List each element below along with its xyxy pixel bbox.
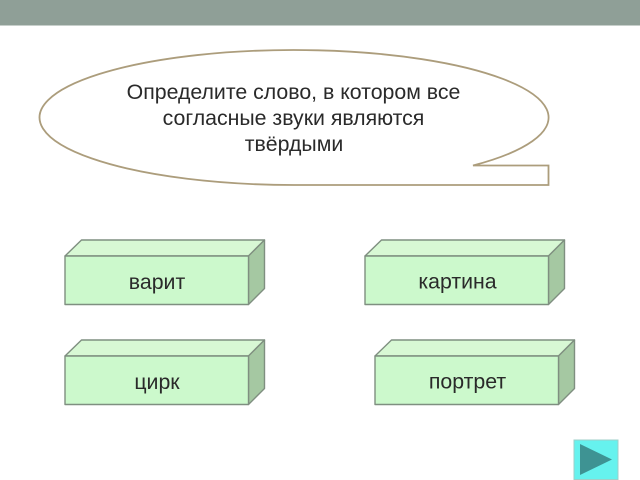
icon: next button [574,440,618,480]
answer box: цирк [65,340,264,404]
panel: question callout [40,50,549,185]
question text: Определите слово, в котором все [127,80,460,104]
answer box: цирк: цирк [134,370,180,394]
answer box: портрет: портрет [429,370,506,394]
question text: твёрдыми [245,132,343,156]
answer box: варит [65,240,264,304]
question text: согласные звуки являются [163,106,424,130]
answer box: варит: варит [129,270,185,294]
answer box: картина [365,240,564,304]
answer box: портрет [375,340,574,404]
answer box: картина: картина [418,270,497,294]
header bar [0,0,640,26]
callout bubble [40,50,549,185]
